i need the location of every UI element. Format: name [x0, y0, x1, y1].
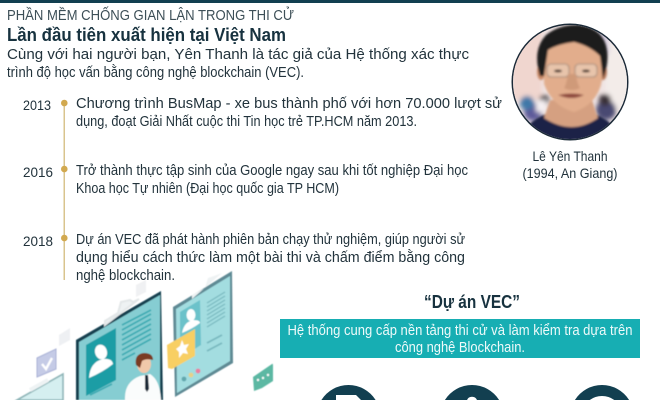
timeline axis — [64, 104, 65, 280]
yellow star card — [167, 329, 195, 369]
mouth — [558, 94, 584, 98]
neck — [544, 100, 598, 127]
text lines — [90, 310, 151, 395]
event: 2016 — [23, 162, 468, 197]
small faded squares — [59, 280, 146, 346]
icon: circle badge — [575, 385, 629, 400]
project description box — [280, 319, 640, 358]
event: 2018: nghệ blockchain. — [76, 267, 175, 284]
hair — [537, 25, 608, 78]
intro text: Cùng với hai người bạn, Yên Thanh là tác giả của Hệ thống xác thực — [7, 46, 469, 63]
event: 2018 — [23, 231, 465, 284]
project description box: công nghệ Blockchain. — [395, 340, 525, 356]
portrait caption: (1994, An Giang) — [522, 165, 618, 181]
intro text: trình độ học vấn bằng công nghệ blockchain (VEC). — [7, 64, 304, 81]
title: Lần đầu tiên xuất hiện tại Việt Nam — [7, 25, 286, 45]
right clipboard — [173, 271, 233, 397]
project description box: Hệ thống cung cấp nền tảng thi cử và làm kiểm tra dựa trên — [288, 323, 632, 339]
portrait caption: Lê Yên Thanh — [532, 148, 608, 164]
center clipboard — [76, 291, 163, 400]
timeline — [23, 95, 502, 284]
icon: chat bubble — [253, 364, 273, 391]
icon: check tile — [37, 349, 56, 377]
portrait caption — [522, 148, 618, 181]
clip — [105, 299, 139, 325]
event: 2013: Chương trình BusMap - xe bus thành phố với hơn 70.000 lượt sử — [76, 95, 502, 112]
icon: person — [445, 385, 499, 400]
event: 2018: Dự án VEC đã phát hành phiên bản chạy thử nghiệm, giúp người sử — [76, 231, 465, 248]
illustration: clipboards and man — [17, 271, 273, 400]
event: 2018: dụng hiểu cách thức làm một bài thi và chấm điểm bằng công — [76, 249, 465, 266]
event: 2016: 2016 — [23, 164, 53, 180]
icon: document — [321, 385, 376, 400]
event: 2016: Khoa học Tự nhiên (Đại học quốc gia TP HCM) — [76, 180, 339, 197]
avatar — [89, 343, 113, 378]
top bar — [0, 0, 660, 3]
event: 2018: 2018 — [23, 233, 53, 249]
ears — [537, 64, 545, 80]
event: 2013: 2013 — [23, 97, 51, 113]
shirt — [530, 114, 611, 139]
portrait photo — [510, 20, 630, 146]
glasses — [547, 64, 569, 77]
project heading: “Dự án VEC” — [424, 292, 520, 312]
man — [125, 353, 161, 400]
face — [543, 42, 602, 112]
event: 2013 — [23, 95, 502, 130]
left clipboard — [17, 374, 63, 400]
intro text — [7, 46, 469, 81]
event: 2013: dụng, đoạt Giải Nhất cuộc thi Tin học trẻ TP.HCM năm 2013. — [76, 113, 417, 130]
kicker heading: PHẦN MỀM CHỐNG GIAN LẬN TRONG THI CỬ — [7, 6, 294, 24]
color dots — [182, 369, 200, 381]
nose — [564, 74, 580, 90]
profile panel — [86, 328, 116, 396]
event: 2016: Trở thành thực tập sinh của Google ngay sau khi tốt nghiệp Đại học — [76, 162, 468, 179]
